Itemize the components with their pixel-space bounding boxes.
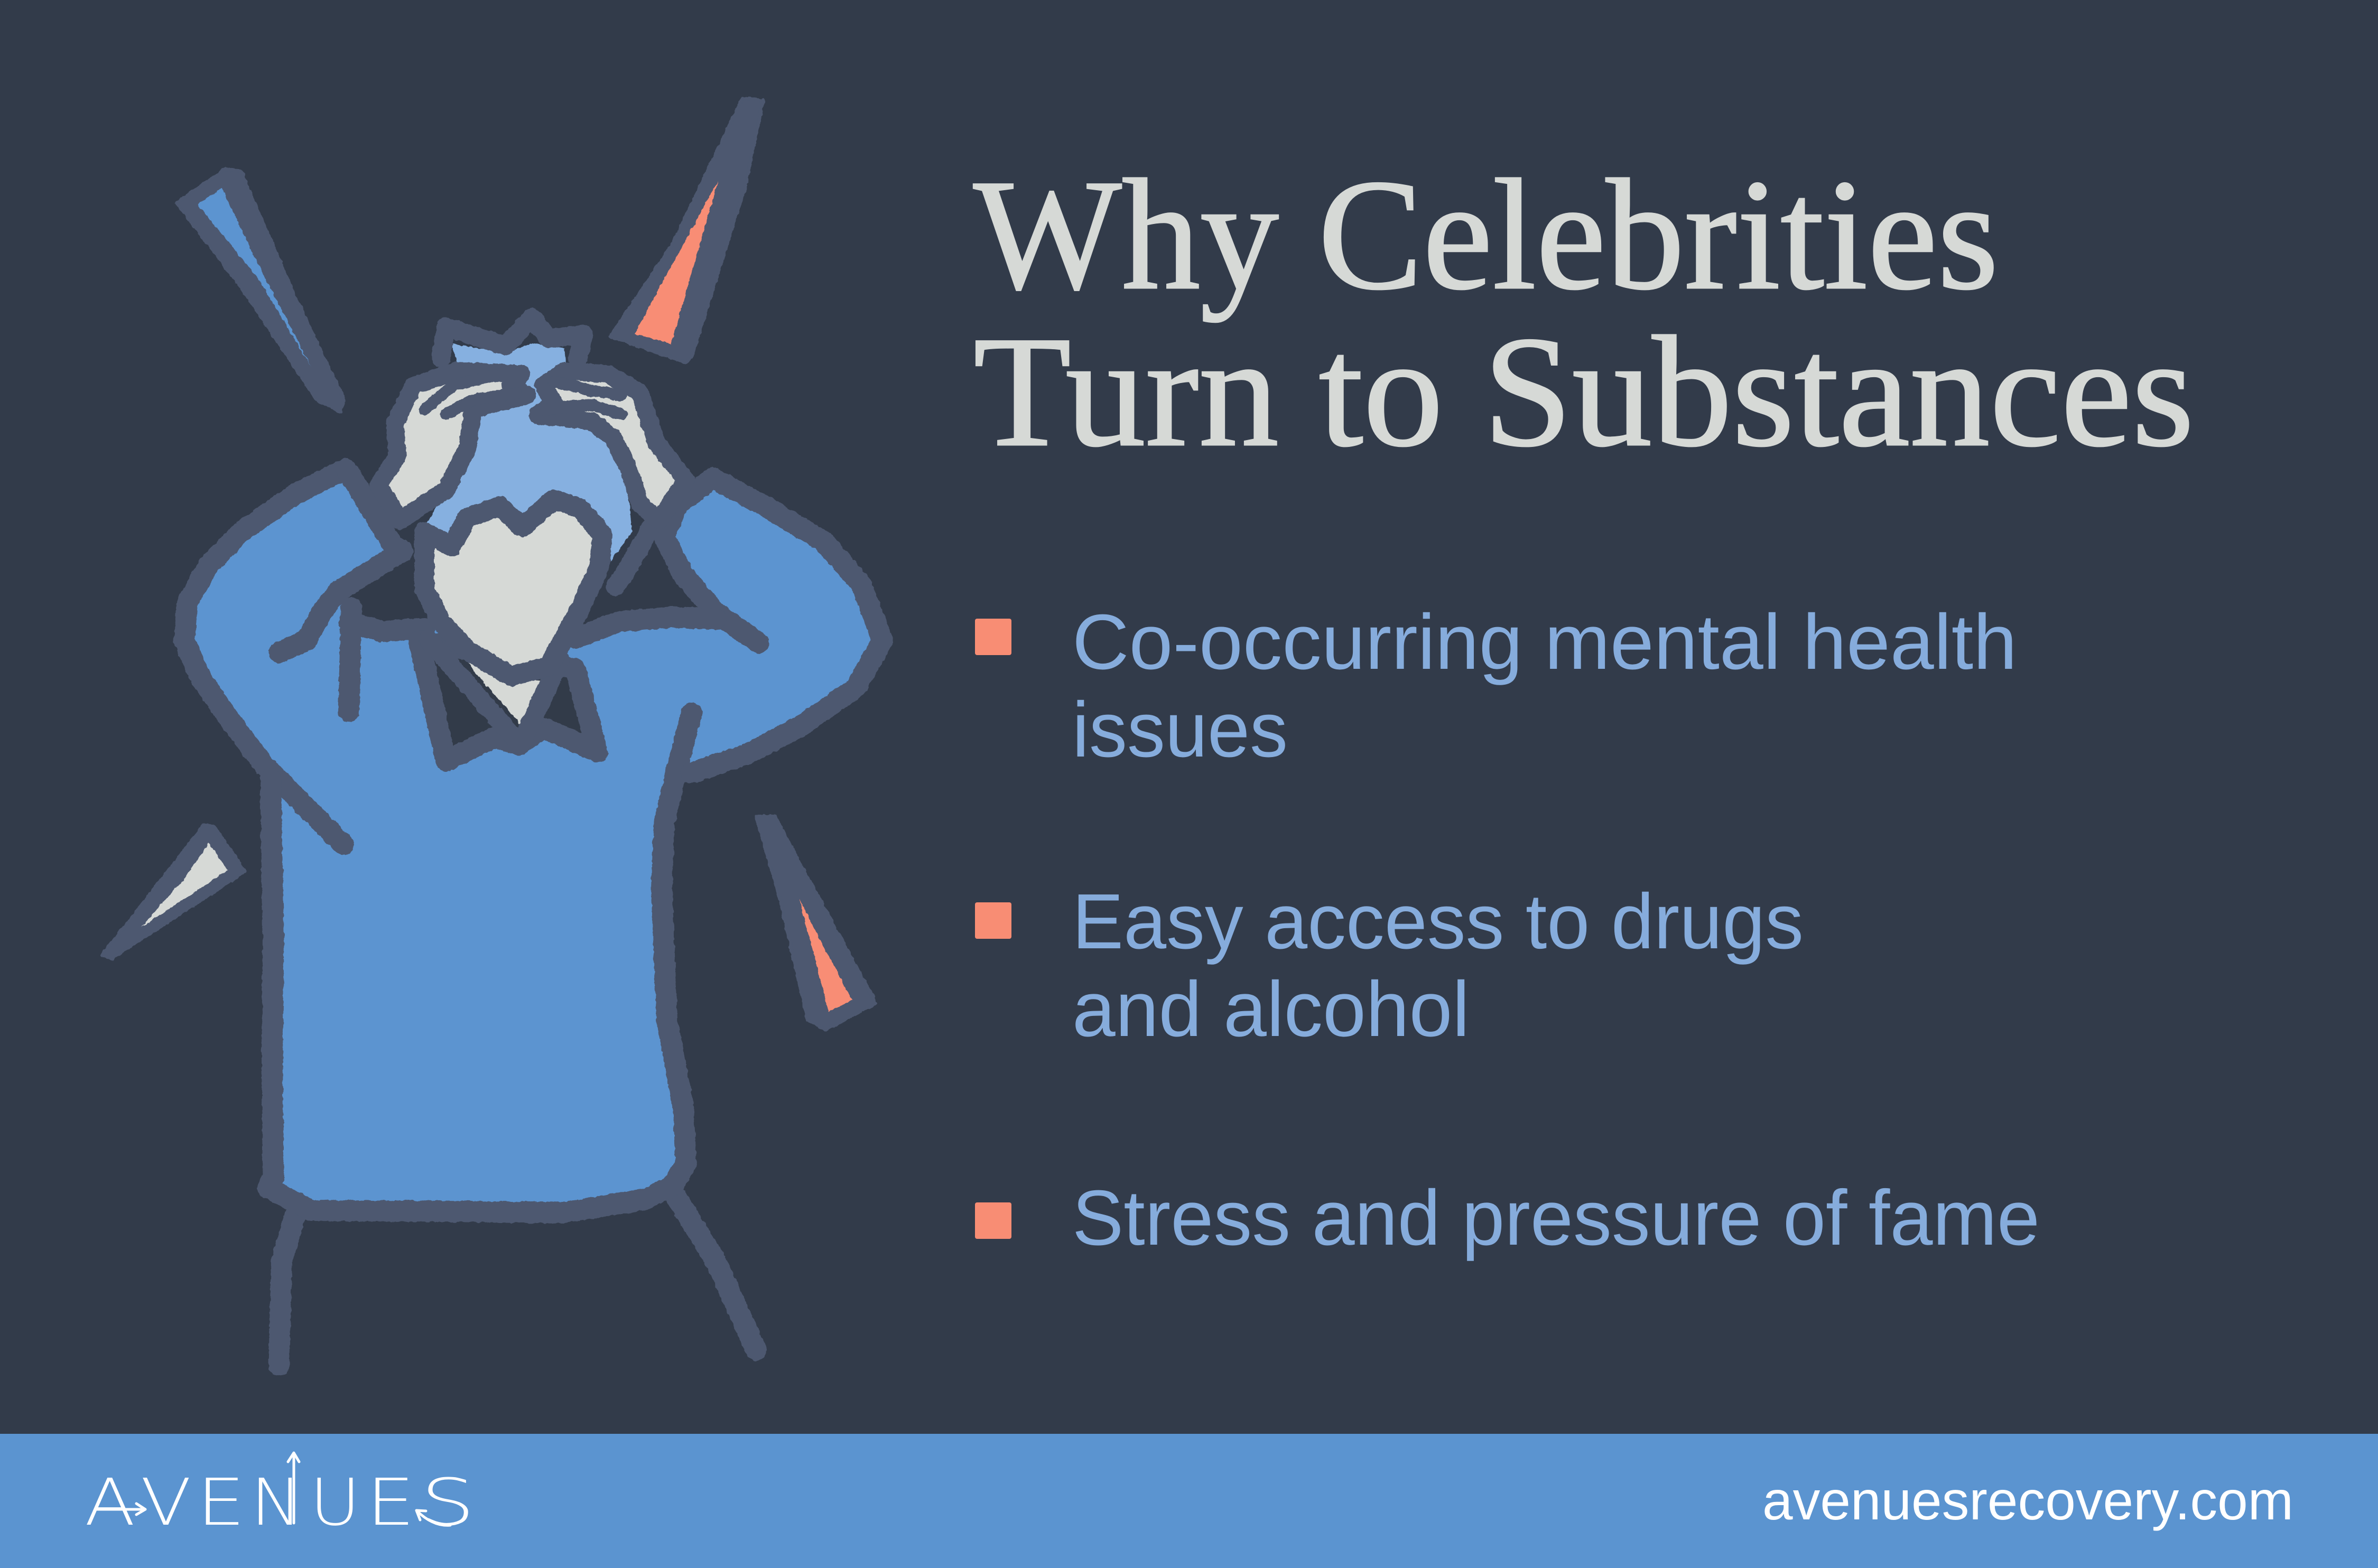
logo: Avenues: U [310, 1465, 360, 1540]
website url: avenuesrecovery.com [1762, 1470, 2293, 1532]
logo: Avenues: E [197, 1465, 245, 1540]
icon: blue spike [177, 169, 343, 412]
icon: cream spike [102, 825, 245, 958]
collar [419, 636, 597, 761]
list item: mental health [975, 599, 2017, 773]
logo: Avenues: V [141, 1465, 191, 1540]
left hand [378, 371, 527, 520]
logo: Avenues: E [366, 1465, 415, 1540]
icon: coral spike top [610, 98, 763, 362]
icon: coral spike bottom [756, 816, 876, 1030]
hair [424, 318, 651, 586]
bullet square [975, 619, 1011, 655]
logo: Avenues: S [421, 1465, 475, 1540]
bullet square [975, 1202, 1011, 1239]
logo: Avenues: N [250, 1465, 302, 1540]
item text: Easy access to drugs [1072, 878, 1804, 965]
list item: stress [975, 1174, 2040, 1262]
footer band [0, 1434, 2378, 1568]
face [424, 499, 602, 676]
title: Why Celebrities [973, 148, 1999, 323]
bullet square [975, 902, 1011, 939]
right hand [537, 371, 686, 520]
logo: Avenues: A [85, 1465, 135, 1540]
panel: illustration of stressed person [100, 96, 893, 1376]
item text: Stress and pressure of fame [1072, 1174, 2040, 1262]
legs [279, 1191, 756, 1366]
list item: easy access [975, 878, 1804, 1053]
item text: and alcohol [1072, 966, 1470, 1053]
item text: issues [1072, 686, 1288, 773]
sweater [184, 469, 883, 1212]
item text: Co-occurring mental health [1072, 599, 2017, 686]
title: Turn to Substances [973, 304, 2194, 479]
title [972, 148, 2194, 479]
logo: Avenues [85, 1452, 475, 1540]
